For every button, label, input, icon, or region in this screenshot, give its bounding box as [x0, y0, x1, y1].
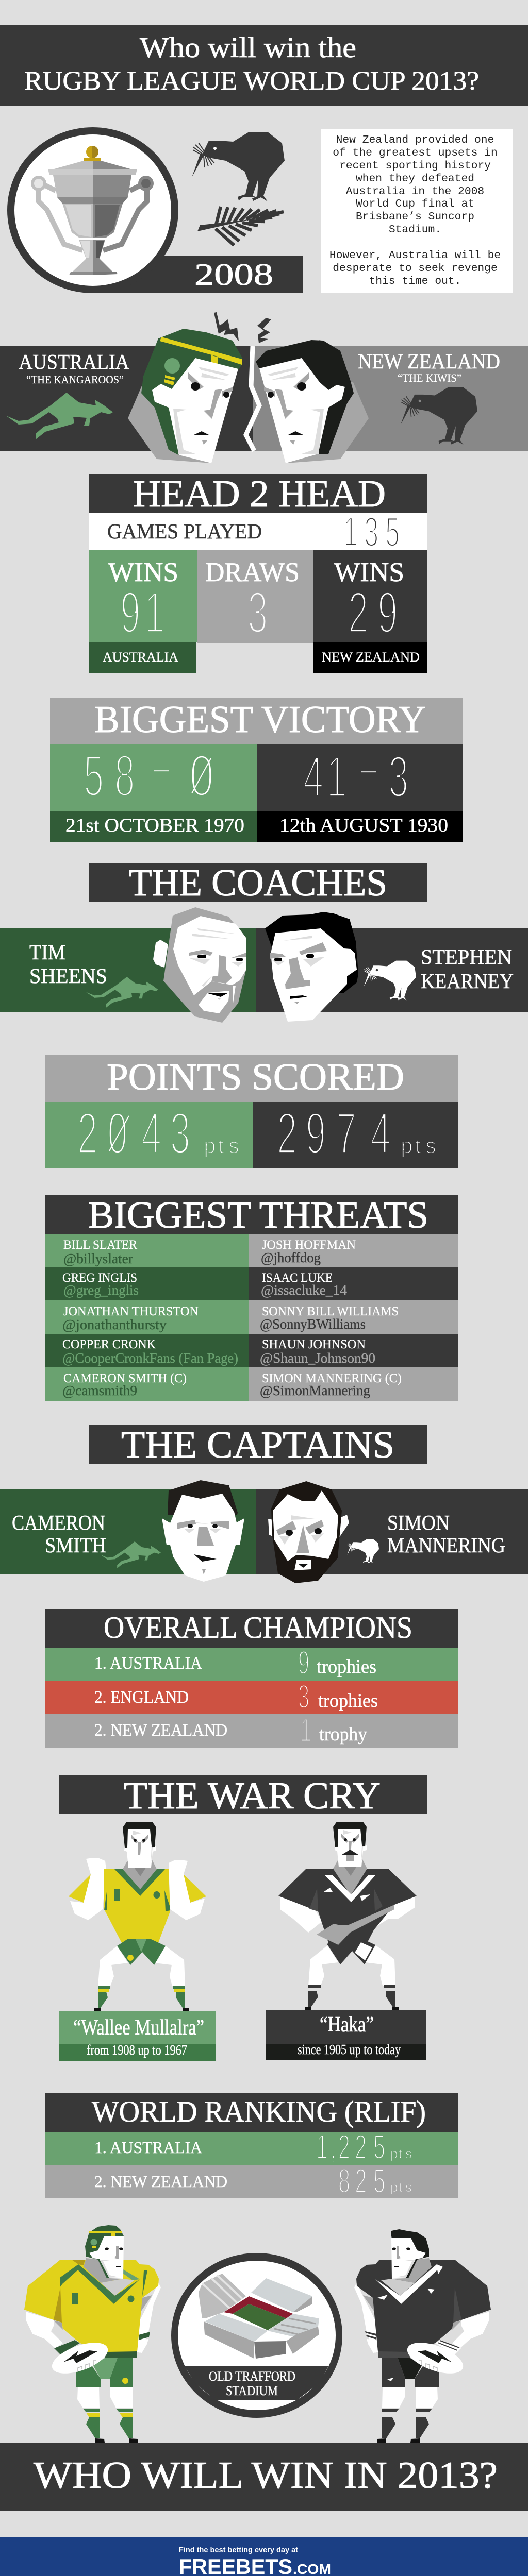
- story text box: New Zealand provided one: [336, 134, 494, 146]
- draws: DRAWS: [205, 557, 300, 587]
- icon: kiwi: [364, 961, 416, 1001]
- threat: Shaun Johnson: SHAUN JOHNSON: [262, 1337, 366, 1351]
- socks: [83, 2409, 100, 2412]
- shirt: [104, 1869, 170, 1943]
- row: Australia: 1. AUSTRALIA: [94, 2138, 202, 2157]
- icon: rugby ball: [48, 2336, 112, 2380]
- threat: Isaac Luke: @issacluke_14: [261, 1282, 347, 1298]
- heading: the captains: THE CAPTAINS: [121, 1424, 394, 1466]
- footer: Find the best betting every day at: [179, 2546, 298, 2554]
- icon: kiwi: [401, 387, 477, 445]
- draws: 3: [248, 580, 268, 646]
- title band: RUGBY LEAGUE WORLD CUP 2013?: [24, 66, 479, 96]
- title band: Who will win the: [140, 32, 356, 64]
- Australia wins: 91: [120, 580, 164, 646]
- threat: Bill Slater: BILL SLATER: [63, 1238, 137, 1252]
- threat: Isaac Luke: ISAAC LUKE: [262, 1271, 333, 1285]
- New Zealand points: pts: [401, 1133, 436, 1158]
- heading: WORLD RANKING (RLIF): [92, 2095, 426, 2128]
- games played: 135: [343, 509, 400, 555]
- figure: New Zealand player with ball: [354, 2229, 491, 2443]
- Australia points: 2043: [77, 1101, 190, 1166]
- socks: [98, 1986, 110, 1989]
- panel: overall champions: [45, 1609, 458, 1749]
- footer: [0, 2537, 528, 2576]
- threat: Cameron Smith: @camsmith9: [62, 1383, 137, 1398]
- heading: OVERALL CHAMPIONS: [104, 1611, 412, 1645]
- figure: Australian player with ball: [24, 2225, 161, 2443]
- New Zealand wins: NEW ZEALAND: [322, 650, 420, 665]
- shorts: [327, 1939, 375, 1964]
- Australia wins: WINS: [108, 557, 178, 587]
- row: England: 3: [298, 1679, 309, 1715]
- row: Australia: [94, 1645, 376, 1681]
- threat: Sonny Bill Williams: SONNY BILL WILLIAMS: [262, 1304, 399, 1318]
- New Zealand player head: [256, 340, 354, 463]
- captain head: Cameron Smith: [162, 1480, 244, 1582]
- label: Stephen Kearney: KEARNEY: [421, 969, 514, 993]
- legs: [77, 2387, 100, 2408]
- plaque: Haka: [266, 2010, 426, 2060]
- 2008 trophy badge: [7, 127, 303, 293]
- label: Australia: AUSTRALIA: [19, 350, 129, 374]
- socks: [308, 1985, 321, 1988]
- label: New Zealand: NEW ZEALAND: [358, 349, 500, 373]
- captain head: Simon Mannering: [268, 1481, 349, 1583]
- score: New Zealand: –: [360, 734, 377, 800]
- crack divider: [246, 346, 259, 451]
- heading: POINTS SCORED: [107, 1056, 404, 1098]
- legs: [308, 1945, 338, 1986]
- threat: Josh Hoffman: [261, 1238, 356, 1265]
- label: New Zealand: “THE KIWIS”: [398, 371, 461, 384]
- label: Cameron Smith: CAMERON: [12, 1511, 105, 1534]
- threat: Jonathan Thurston: JONATHAN THURSTON: [63, 1304, 199, 1318]
- panel: head 2 head: [89, 473, 427, 673]
- row: New Zealand: [94, 1713, 367, 1749]
- label: Cameron Smith: [12, 1511, 106, 1557]
- games played: [107, 509, 400, 555]
- label: New Zealand: [358, 349, 500, 384]
- row: England: trophies: [318, 1690, 378, 1711]
- Australia wins: [103, 557, 178, 665]
- row: Australia: 1,225: [316, 2128, 385, 2166]
- story text box: World Cup final at: [356, 198, 474, 210]
- stadium label band: OLD TRAFFORD: [209, 2369, 295, 2384]
- label: Australia: “THE KANGAROOS”: [26, 373, 124, 386]
- story text box: when they defeated: [356, 173, 474, 185]
- row: New Zealand: 825: [338, 2162, 385, 2200]
- closing band: [0, 2443, 528, 2511]
- label: Tim Sheens: SHEENS: [29, 964, 107, 988]
- threat: Greg Inglis: GREG INGLIS: [62, 1271, 137, 1285]
- threat: Cameron Smith: CAMERON SMITH (C): [63, 1371, 187, 1385]
- threat: Greg Inglis: @greg_inglis: [63, 1282, 139, 1298]
- threat: Greg Inglis: [62, 1271, 139, 1298]
- dates: [65, 815, 448, 836]
- threat: Bill Slater: @billyslater: [63, 1251, 133, 1266]
- threat: Sonny Bill Williams: [260, 1304, 399, 1332]
- plaque: Haka: “Haka”: [320, 2013, 374, 2037]
- panel: biggest victory: [50, 698, 463, 842]
- figure: Australian war cry player: [69, 1822, 206, 2011]
- icon: kiwi bird: [192, 132, 285, 201]
- plaque: Wallee Mullalra: “Wallee Mullalra”: [73, 2016, 204, 2040]
- story text box: Brisbane’s Suncorp: [356, 211, 474, 223]
- arms: [280, 1896, 322, 1933]
- panel: captains band: [0, 1480, 528, 1583]
- icon: stadium: [199, 2274, 319, 2359]
- score: Australia: 58: [84, 743, 135, 809]
- story text box: this time out.: [369, 275, 461, 287]
- stadium label band: [185, 2366, 328, 2400]
- dates: 21st OCTOBER 1970: [65, 815, 244, 836]
- panel: world ranking: [45, 2093, 458, 2200]
- icon: kangaroo: [101, 1541, 161, 1568]
- row: New Zealand: 1: [300, 1713, 311, 1749]
- row: New Zealand: 2. NEW ZEALAND: [94, 2172, 227, 2191]
- row: Australia: pts: [390, 2146, 412, 2161]
- icon: rugby ball: [403, 2336, 467, 2380]
- label: Simon Mannering: SIMON: [387, 1511, 450, 1534]
- story text box: Stadium.: [389, 224, 441, 236]
- story text box: desperate to seek revenge: [333, 262, 498, 275]
- icon: trophy: [31, 146, 154, 275]
- story text box: recent sporting history: [339, 160, 491, 172]
- row: England: [94, 1679, 378, 1715]
- heading: the war cry: [59, 1775, 427, 1817]
- arms: [26, 2312, 63, 2348]
- score: New Zealand: 41: [303, 744, 347, 810]
- shorts: [117, 1939, 166, 1965]
- threat: Josh Hoffman: @jhoffdog: [261, 1250, 321, 1265]
- sleeves: [69, 1874, 103, 1903]
- label: Australia: [19, 350, 129, 386]
- New Zealand wins: [322, 557, 420, 665]
- label: Simon Mannering: [387, 1511, 505, 1557]
- coach head: Stephen Kearney: [265, 912, 358, 1022]
- socks: [416, 2409, 432, 2412]
- threat: Simon Mannering: SIMON MANNERING (C): [262, 1371, 402, 1385]
- panel: points scored: [45, 1055, 458, 1168]
- row: New Zealand: [94, 2162, 412, 2200]
- label: Simon Mannering: MANNERING: [387, 1533, 505, 1557]
- threat: Cameron Smith: [62, 1371, 187, 1398]
- threat: Simon Mannering: [260, 1371, 402, 1398]
- story text box: [321, 129, 513, 293]
- threat: Cooper Cronk: COPPER CRONK: [62, 1337, 156, 1351]
- score: Australia: 0: [189, 743, 214, 809]
- figure: New Zealand haka player: [278, 1822, 417, 2010]
- shirt: [24, 2260, 159, 2352]
- panel: coaches band: [0, 907, 528, 1023]
- closing band: WHO WILL WIN IN 2013?: [34, 2454, 498, 2497]
- games played: GAMES PLAYED: [107, 519, 262, 543]
- neck and collar: [392, 2258, 432, 2283]
- threat: Isaac Luke: [261, 1271, 347, 1298]
- threat: Josh Hoffman: JOSH HOFFMAN: [262, 1238, 356, 1252]
- score: New Zealand: 3: [388, 744, 408, 810]
- row: New Zealand: 2. NEW ZEALAND: [94, 1721, 227, 1740]
- threat: Cooper Cronk: [62, 1337, 238, 1366]
- shirt: [278, 1869, 417, 1943]
- heading: HEAD 2 HEAD: [133, 473, 386, 515]
- label: Cameron Smith: SMITH: [45, 1533, 106, 1557]
- threat: Jonathan Thurston: @jonathanthursty: [62, 1317, 167, 1332]
- icon: kangaroo: [6, 393, 113, 439]
- story text box: However, Australia will be: [329, 249, 501, 262]
- score: Australia: –: [153, 733, 170, 799]
- heading: the coaches: THE COACHES: [129, 862, 387, 904]
- shorts: [378, 2351, 410, 2358]
- story text box: Australia in the 2008: [346, 185, 484, 198]
- threat: Jonathan Thurston: [62, 1304, 199, 1332]
- New Zealand wins: WINS: [334, 557, 404, 587]
- legs: [98, 1946, 128, 1986]
- heading: the war cry: THE WAR CRY: [124, 1775, 381, 1817]
- wrist band: [435, 2340, 461, 2354]
- row: England: 2. ENGLAND: [94, 1688, 189, 1707]
- crossing arm: [317, 1905, 394, 1945]
- heading: BIGGEST THREATS: [88, 1194, 428, 1236]
- plaque: Haka: since 1905 up to today: [298, 2042, 401, 2057]
- threat: Shaun Johnson: @Shaun_Johnson90: [260, 1350, 375, 1366]
- shorts: [105, 2351, 137, 2358]
- threat: Shaun Johnson: [260, 1337, 375, 1366]
- panel: biggest threats: [45, 1194, 458, 1401]
- New Zealand wins: 29: [348, 580, 398, 646]
- label: Tim Sheens: TIM: [29, 940, 65, 964]
- shirt: [356, 2260, 491, 2352]
- threat: Bill Slater: [63, 1238, 137, 1266]
- row: New Zealand: pts: [390, 2179, 412, 2195]
- legs: [416, 2387, 438, 2408]
- Australia points: [77, 1101, 239, 1166]
- panel: teams face-off: [0, 312, 528, 463]
- story text box: of the greatest upsets in: [333, 147, 498, 159]
- icon: silver fern: [197, 207, 285, 245]
- Australian player head: [141, 329, 242, 463]
- threat: Simon Mannering: @SimonMannering: [260, 1383, 370, 1398]
- draws: [205, 557, 300, 646]
- label: Stephen Kearney: [421, 945, 514, 993]
- icon: kangaroo: [86, 977, 158, 1008]
- row: New Zealand: trophy: [319, 1724, 367, 1745]
- year label: 2008: [194, 258, 273, 292]
- dates: 12th AUGUST 1930: [279, 815, 448, 836]
- plaque: Wallee Mullalra: from 1908 up to 1967: [87, 2042, 187, 2058]
- arms: [452, 2312, 489, 2348]
- coach head: Tim Sheens: [153, 907, 246, 1023]
- New Zealand points: 2974: [277, 1101, 391, 1166]
- stadium badge: [171, 2253, 342, 2418]
- score: New Zealand: [303, 734, 408, 810]
- hexagon backdrop: [128, 382, 211, 463]
- threat: Sonny Bill Williams: @SonnyBWilliams: [260, 1316, 366, 1332]
- neck and collar: [84, 2258, 123, 2283]
- label: Stephen Kearney: STEPHEN: [421, 945, 512, 969]
- arms: [70, 1858, 106, 1920]
- Australia wins: AUSTRALIA: [103, 650, 178, 665]
- icon: lightning bolts: [214, 312, 271, 343]
- tongue: [346, 1855, 354, 1861]
- row: Australia: 1. AUSTRALIA: [94, 1654, 202, 1673]
- row: Australia: 9: [298, 1645, 309, 1681]
- label: Tim Sheens: [29, 940, 107, 988]
- wrist band: [54, 2340, 80, 2354]
- icon: kiwi: [347, 1539, 379, 1563]
- row: Australia: [94, 2128, 412, 2166]
- plaque: Wallee Mullalra: [59, 2011, 216, 2061]
- threat: Cooper Cronk: @CooperCronkFans (Fan Page): [62, 1350, 238, 1366]
- heading: BIGGEST VICTORY: [94, 699, 426, 741]
- row: Australia: trophies: [317, 1656, 376, 1677]
- Australia points: pts: [204, 1133, 239, 1158]
- stadium label band: STADIUM: [226, 2383, 278, 2398]
- title band: [0, 25, 528, 106]
- helmet and face: [85, 2225, 124, 2278]
- score: Australia: [84, 733, 214, 809]
- hair and face: [391, 2229, 429, 2278]
